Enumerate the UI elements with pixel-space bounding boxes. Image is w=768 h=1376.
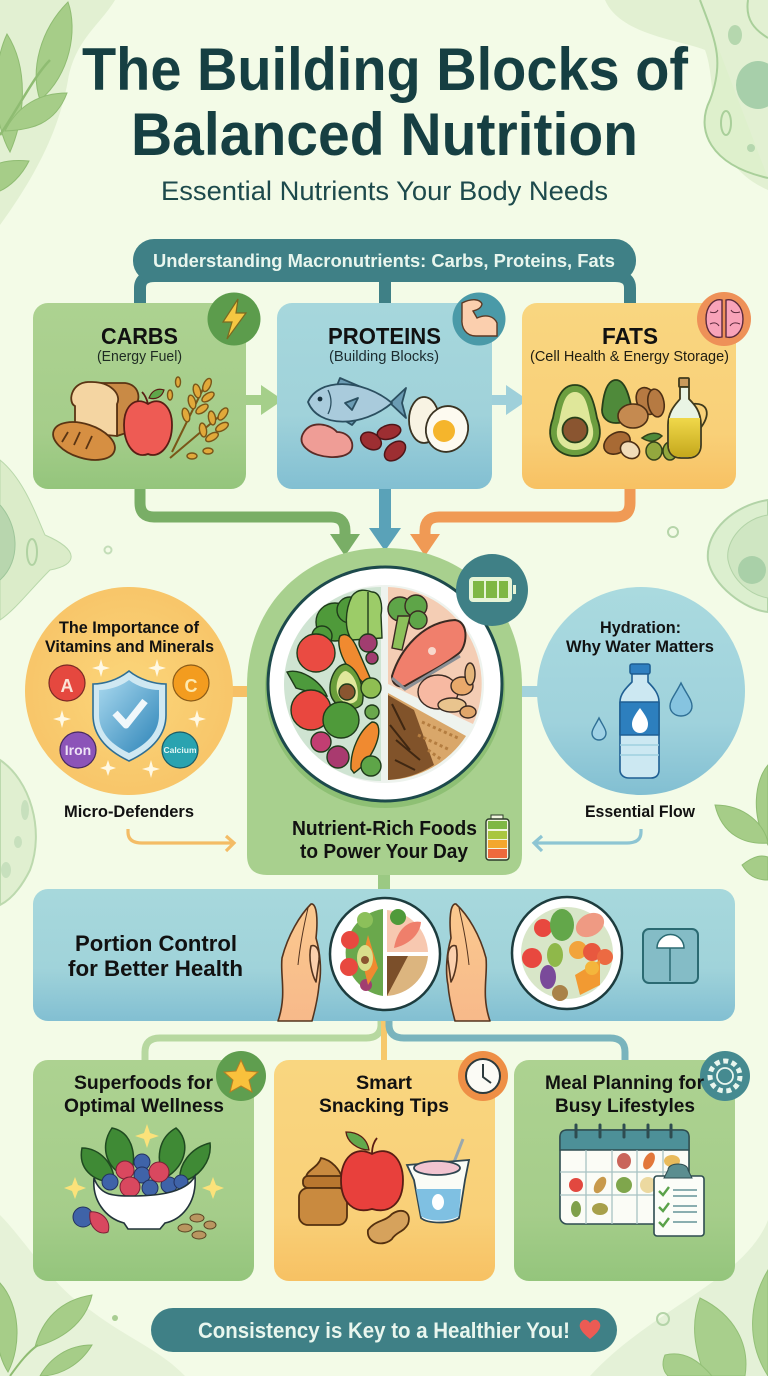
icon: olives [642,433,677,460]
connector: portion to meal planning [389,1021,625,1060]
icon: red apple [124,389,172,455]
arrow: carbs to proteins [246,385,283,415]
icon: muscle badge [452,292,506,346]
heading: hydration: Hydration: [600,619,681,637]
subheading: proteins: (Building Blocks) [329,349,439,365]
footer pill: Consistency is Key to a Healthier You! [198,1318,570,1343]
icon: shield [93,671,166,761]
icon: heart [580,1320,600,1339]
heading: snacking [319,1072,449,1117]
plate: grains wedge [388,693,466,780]
plate: vegetable half [284,587,382,781]
panel: smart snacking [274,1051,508,1281]
icon: iron: Iron [65,742,91,758]
connector: vitamins to center [232,686,248,697]
header pill: macronutrients: Understanding Macronutrients: Carbs, Proteins, Fats [153,250,615,271]
icon: halved avocado [550,385,600,456]
icon: oversized plate [512,897,622,1009]
connector: header to macronutrient cards [140,276,630,303]
icon: fish [308,378,406,425]
heading: superfoods [64,1072,224,1117]
icon: almonds [600,427,643,462]
icon: water drop small [592,718,606,740]
icon: wheat [168,377,230,459]
heading: superfoods: Optimal Wellness [64,1095,224,1117]
text: nutrient-rich foods [292,817,477,863]
icon: vitamin A [49,665,85,701]
icon: whole avocado [602,380,632,423]
icon: weighing scale [643,929,698,983]
icon: battery badge [456,554,528,626]
heading: fats: FATS [602,323,658,349]
panel: proteins [277,292,506,489]
decoration: left mid cell [0,460,71,620]
icon: calendar [560,1125,689,1224]
text: nutrient-rich foods: Nutrient-Rich Foods [292,817,477,840]
icon: steak [301,424,352,457]
decoration: left lower cell [0,760,36,905]
icon: peanut butter jar [299,1158,347,1225]
connector: portion to snacking [381,1021,387,1060]
text: portion control [68,931,243,981]
icon: water drop large [670,683,692,716]
icon: iron [60,732,96,768]
text: portion control: Portion Control [75,931,237,956]
panel: meal planning [514,1051,750,1281]
subheading: carbs: (Energy Fuel) [97,349,182,365]
heading: meal planning: Busy Lifestyles [555,1095,695,1117]
arrow: essential flow to center [534,829,641,851]
icon: water bottle [620,664,659,778]
icon: calcium [162,732,198,768]
panel: superfoods [33,1051,266,1281]
icon: eggs [409,397,473,457]
icon: vitamin C: C [184,676,198,696]
heading: superfoods: Superfoods for [74,1072,213,1094]
icon: loose berries and seeds [73,1207,216,1239]
footer pill [151,1308,617,1352]
icon: kidney beans [357,422,409,465]
icon: walnuts and pecans [618,384,666,428]
title [82,36,689,168]
icon: sparkles [53,659,206,778]
decoration: bottom left leaves [0,1215,185,1376]
icon: calcium: Calcium [163,745,197,755]
icon: right hand [447,904,490,1021]
decoration: top right cell [605,0,768,190]
icon: star badge [216,1051,266,1101]
icon: yogurt cup [407,1139,469,1222]
connector: carbs to plate [140,489,360,556]
heading: vitamins: The Importance of [59,619,199,637]
heading: hydration: Why Water Matters [566,638,714,656]
heading: vitamins [45,619,214,656]
icon: clipboard [654,1164,704,1236]
icon: bread loaf [71,382,138,436]
connector: portion to superfoods [145,1021,381,1060]
subheading: fats: (Cell Health & Energy Storage) [530,349,729,365]
decoration: right mid cell [104,500,768,612]
text: portion control: for Better Health [68,956,243,981]
icon: left hand [278,904,320,1021]
panel: carbs [33,292,260,489]
icon: lightning badge [208,292,260,346]
header pill: macronutrients [133,239,636,282]
panel: vitamins and minerals [25,587,233,795]
heading: snacking: Snacking Tips [319,1095,449,1117]
heading: proteins: PROTEINS [328,323,441,349]
title: Balanced Nutrition [131,101,638,168]
decoration: right side leaves [715,765,768,880]
panel: fats [522,292,751,489]
decoration: top left leaves [0,0,115,225]
icon: snack apple [341,1132,403,1210]
heading: hydration [566,619,714,656]
icon: peanut [368,1211,409,1243]
icon: bread roll [48,415,120,467]
connector: center to portion [378,875,390,890]
connector: fats to plate [410,489,630,556]
icon: gold sparkles [64,1124,224,1199]
decoration: bottom right leaves [590,1220,768,1376]
heading: meal planning: Meal Planning for [545,1072,704,1094]
arrow: proteins to fats [492,385,528,415]
subtitle: Essential Nutrients Your Body Needs [161,176,608,206]
title: The Building Blocks of [82,36,689,103]
label: micro-defenders: Micro-Defenders [64,802,194,821]
panel: portion control [33,889,735,1021]
text: nutrient-rich foods: to Power Your Day [300,840,469,863]
icon: berry bowl [81,1128,210,1229]
icon: vitamin A: A [60,676,74,696]
heading: carbs: CARBS [101,323,178,349]
icon: portion plate [330,898,440,1010]
icon: vitamin C [173,665,209,701]
arrow: micro-defenders to center [128,829,234,851]
icon: gear badge [700,1051,750,1101]
panel: nutrient-rich foods [247,548,528,875]
icon: oil bottle [668,378,707,458]
heading: vitamins: Vitamins and Minerals [45,638,214,656]
heading: meal planning [545,1072,704,1117]
plate: protein wedge [388,587,482,724]
icon: plate of food [265,567,505,808]
panel: hydration [537,587,745,795]
icon: small battery [486,815,509,860]
connector: proteins to plate [369,489,401,551]
label: essential flow: Essential Flow [585,802,696,821]
heading: snacking: Smart [356,1072,413,1094]
icon: brain badge [697,292,751,346]
icon: clock badge [458,1051,508,1101]
connector: hydration to center [521,686,538,697]
